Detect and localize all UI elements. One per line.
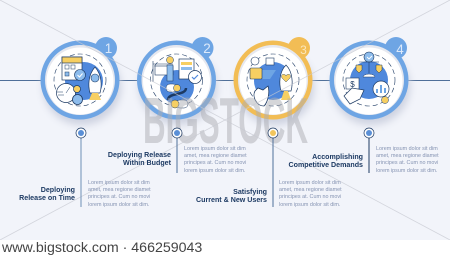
body text 2	[184, 146, 247, 174]
heading 2: Within Budget	[123, 159, 171, 167]
body text 2: lorem ipsum dolor sit dim.	[184, 168, 245, 174]
heading 1: Deploying	[41, 186, 75, 194]
body text 4: principes at. Cum no movi	[376, 160, 438, 166]
step 3 circle: 3	[300, 43, 307, 57]
connector 3	[268, 128, 278, 207]
heading 1: Release on Time	[19, 194, 75, 202]
body text 3: amet, mea regione diamet	[279, 187, 342, 193]
body text 2: principes at. Cum no movi	[184, 160, 246, 166]
body text 4	[376, 146, 439, 174]
connector 2	[172, 128, 182, 173]
step 4 circle	[330, 37, 410, 125]
heading 2: Deploying Release	[108, 151, 171, 159]
connector 4	[364, 128, 374, 173]
body text 1: Lorem ipsum dolor sit dim	[88, 180, 150, 186]
connector 1	[76, 128, 86, 207]
body text 1: lorem ipsum dolor sit dim.	[88, 202, 149, 208]
heading 3	[196, 188, 267, 204]
step 2 circle: 2	[203, 41, 211, 56]
footer stock id: www.bigstock.com · 466259043	[2, 240, 202, 256]
step 1 circle: 1	[105, 41, 112, 56]
body text 3: lorem ipsum dolor sit dim.	[279, 202, 340, 208]
heading 4	[288, 153, 363, 169]
body text 2: Lorem ipsum dolor sit dim	[184, 146, 246, 152]
step 2 circle	[137, 37, 217, 125]
heading 3: Satisfying	[233, 188, 267, 196]
step 4 circle: $	[350, 80, 355, 89]
body text 2: amet, mea regione diamet	[184, 153, 247, 159]
body text 3: Lorem ipsum dolor sit dim	[279, 180, 341, 186]
heading 1	[19, 186, 75, 202]
step 4 circle: 4	[396, 42, 404, 57]
body text 4: lorem ipsum dolor sit dim.	[376, 168, 437, 174]
horizontal timeline	[0, 80, 450, 82]
body text 4: amet, mea regione diamet	[376, 153, 439, 159]
heading 3: Current & New Users	[196, 196, 267, 204]
step 3 circle	[234, 37, 314, 125]
body text 1	[88, 180, 151, 208]
heading 4: Accomplishing	[312, 153, 363, 161]
body text 4: Lorem ipsum dolor sit dim	[376, 146, 438, 152]
heading 4: Competitive Demands	[288, 161, 363, 169]
body text 3	[279, 180, 342, 208]
body text 1: amet, mea regione diamet	[88, 187, 151, 193]
step 1 circle	[40, 37, 121, 125]
body text 1: principes at. Cum no movi	[88, 194, 150, 200]
body text 3: principes at. Cum no movi	[279, 194, 341, 200]
heading 2	[108, 151, 171, 167]
